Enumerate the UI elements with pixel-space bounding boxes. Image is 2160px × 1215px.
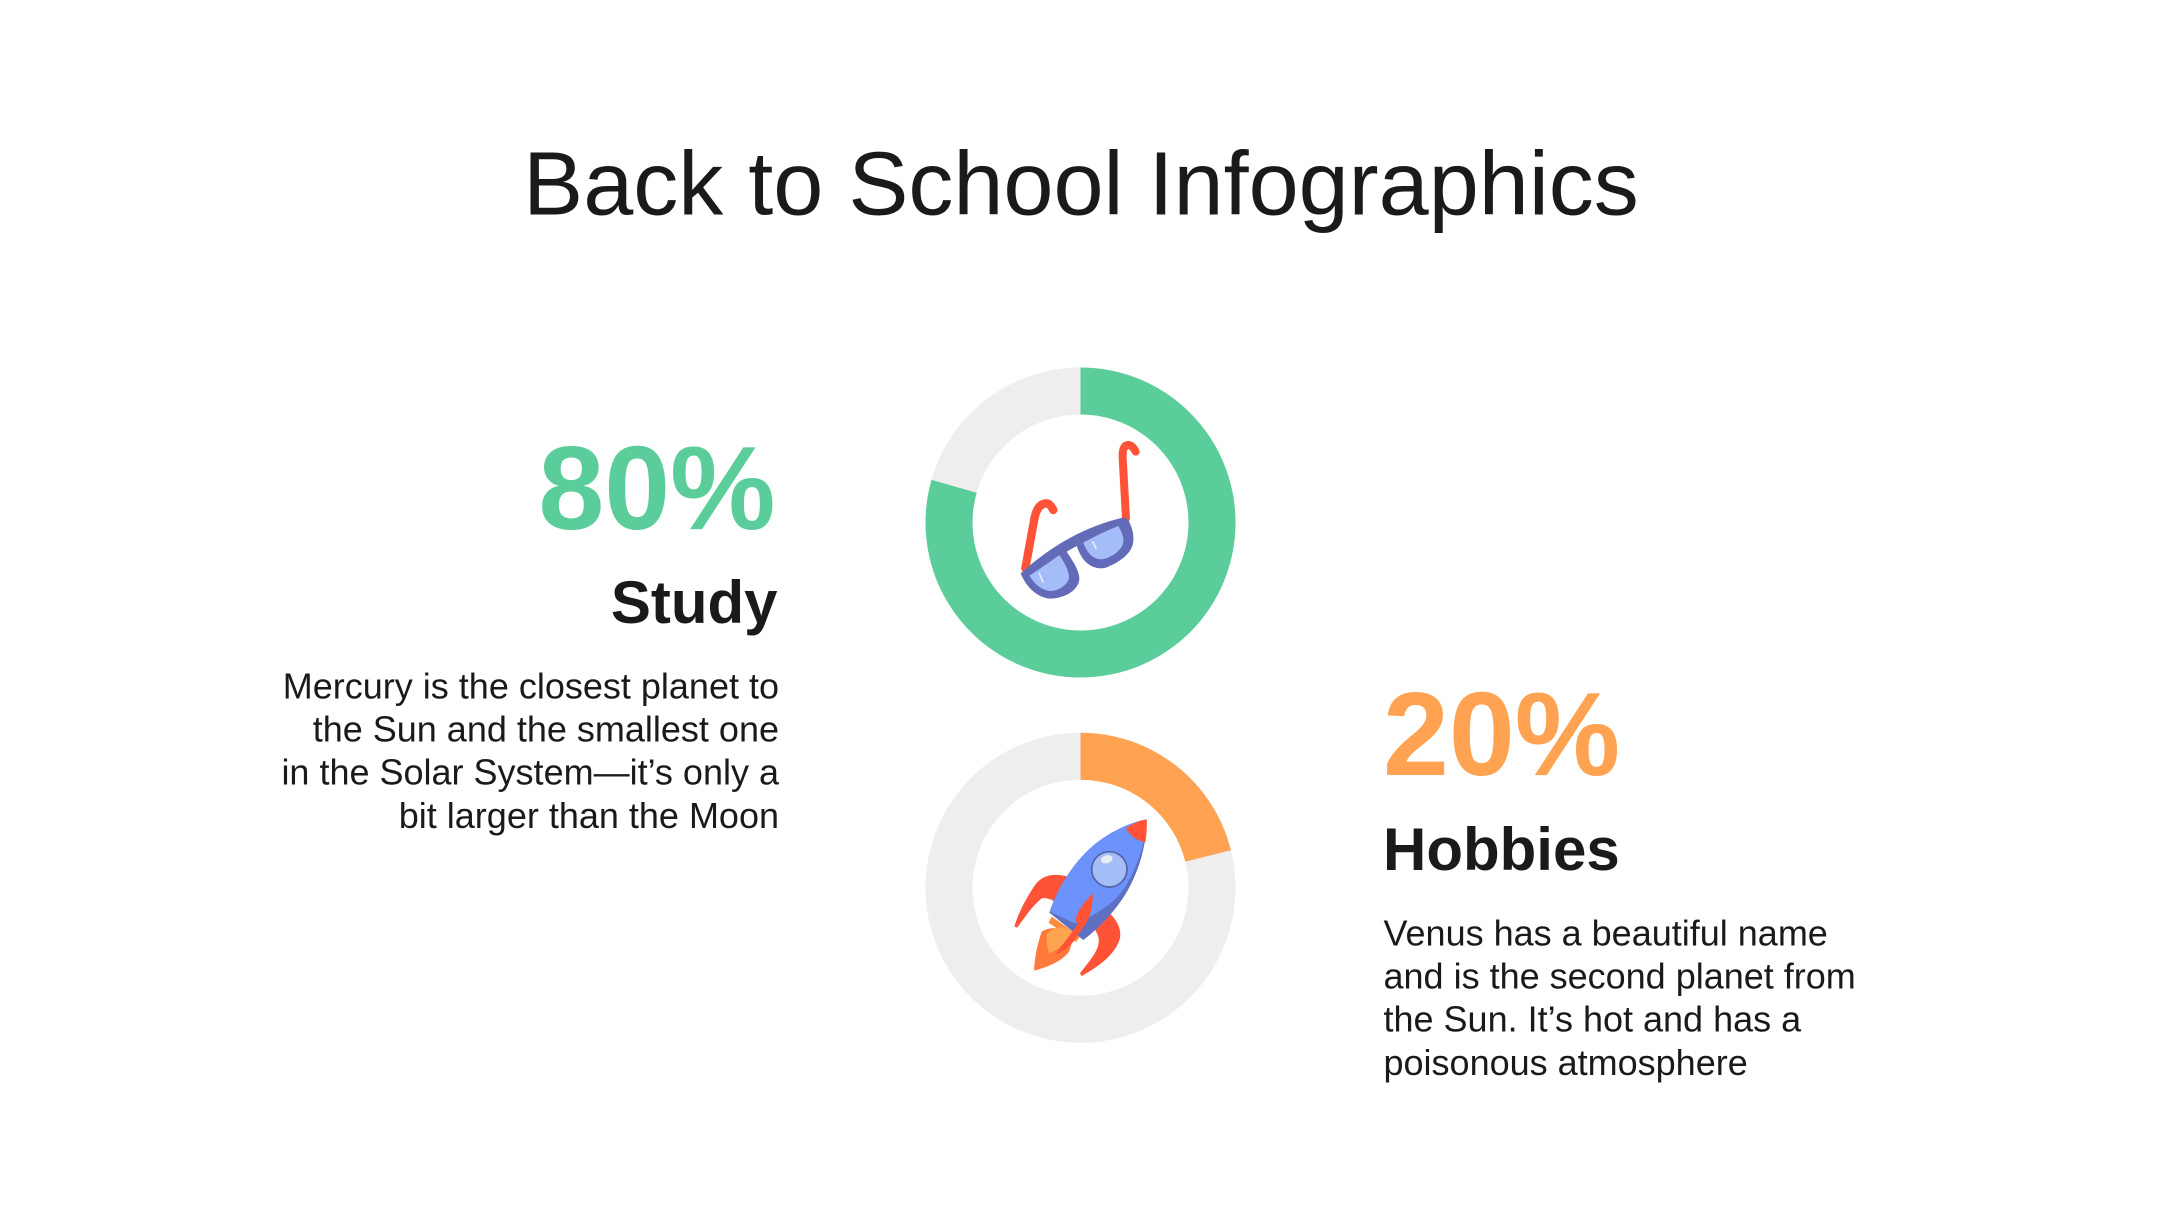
hobbies percentage: 20% [1383,669,1620,801]
study description: in the Solar System—it’s only a [281,752,780,792]
title: Back to School Infographics [523,134,1639,234]
hobbies description: Venus has a beautiful name [1384,912,1828,954]
study description: Mercury is the closest planet to [283,666,779,706]
donut chart: 80% [949,391,1212,654]
study percentage: 80% [538,423,776,555]
study description: bit larger than the Moon [399,795,779,836]
hobbies description: the Sun. It’s hot and has a [1384,998,1802,1040]
hobbies heading: Hobbies [1383,816,1620,883]
donut chart: 20% [949,756,1212,1019]
hobbies description: poisonous atmosphere [1384,1042,1748,1083]
panel: hobbies [1383,669,1856,1083]
study heading: Study [611,569,778,636]
panel: study [281,423,780,836]
icon: glasses [1021,445,1136,599]
hobbies description: and is the second planet from [1384,956,1856,996]
icon: rocket [1014,819,1147,976]
study description: the Sun and the smallest one [313,708,779,750]
